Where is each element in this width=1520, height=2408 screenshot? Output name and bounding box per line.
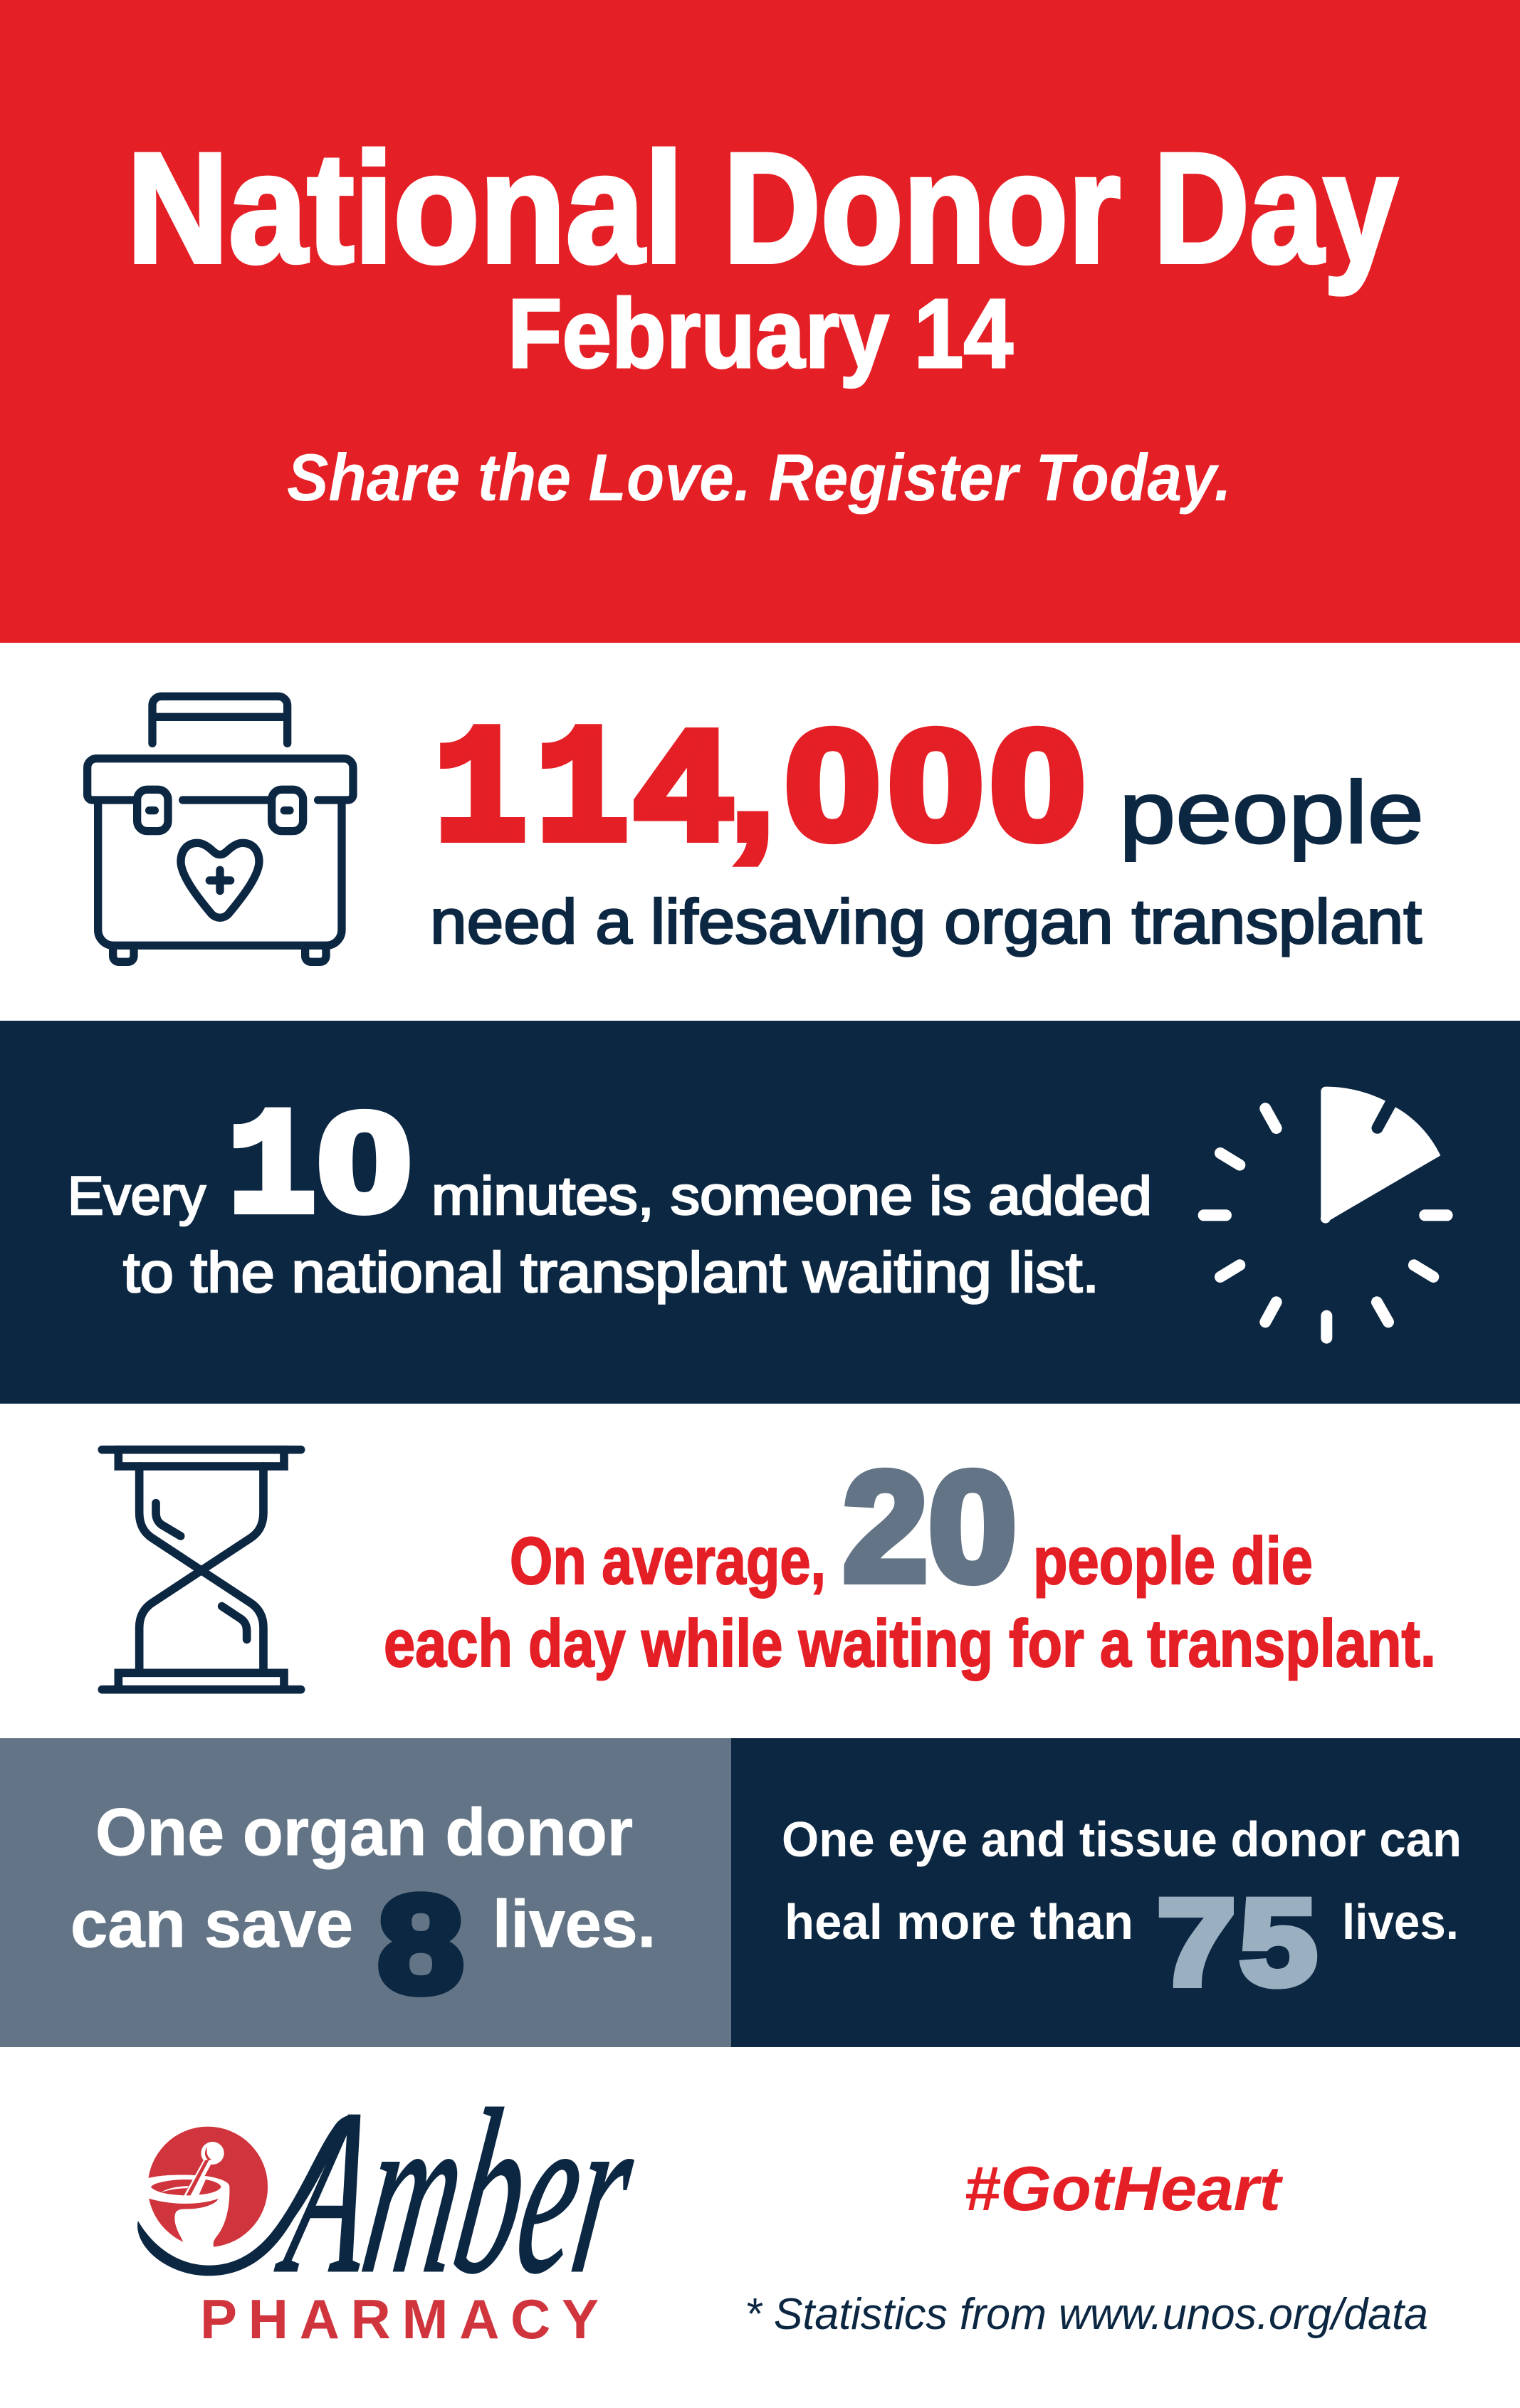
statistic: 20: 2	[843, 1441, 928, 1614]
label: people: people	[1119, 764, 1424, 862]
text: heal more than: heal more than	[785, 1894, 1133, 1950]
title: Day	[1153, 120, 1398, 295]
statistic: 114,000: 0	[888, 699, 984, 872]
swoosh	[137, 2115, 352, 2276]
title: Donor	[723, 120, 1121, 295]
statistic: 75: 7	[1157, 1874, 1236, 2011]
statistic: 20: 0	[928, 1441, 1017, 1614]
hashtag: #GotHeart	[964, 2153, 1284, 2224]
statistic: 114,000: 1	[535, 699, 629, 889]
icon: mortar and pestle	[142, 2127, 268, 2249]
statistic: 114,000: 0	[990, 699, 1086, 872]
statistic: 10: 0	[318, 1085, 412, 1240]
text: on average: On average,	[510, 1523, 826, 1598]
text: minutes: minutes, someone is added	[431, 1166, 1152, 1226]
statistic: 20	[843, 1441, 1017, 1614]
panel: 20 people	[102, 1441, 1436, 1690]
logo: Amber Pharmacy	[137, 2061, 651, 2350]
icon: hourglass	[102, 1450, 301, 1690]
statistic: 114,000	[434, 699, 1086, 889]
statistic: 75	[1157, 1874, 1317, 2011]
wordmark: Pharmacy: PHARMACY	[200, 2288, 599, 2350]
panel: every 10 minutes	[0, 1021, 1520, 1404]
statistic: 114,000: 0	[785, 699, 881, 872]
statistic: 75: 5	[1239, 1874, 1317, 2011]
tagline: Share the Love. Register Today.	[287, 440, 1232, 515]
statistic: 8: 8	[378, 1867, 463, 2021]
panel: header	[0, 0, 1520, 643]
source note: * Statistics from www.unos.org/data	[745, 2290, 1428, 2339]
statistic: 114,000: ,	[730, 699, 775, 872]
panel: eye and tissue donor	[731, 1738, 1520, 2047]
caption: transplant need: need a lifesaving organ transplant	[430, 886, 1422, 957]
statistic: 114,000: 4	[636, 699, 730, 872]
icon: organ transport box	[88, 696, 353, 962]
statistic: 10	[228, 1085, 412, 1256]
text: every: Every	[68, 1166, 206, 1226]
icon: clock	[1204, 1087, 1447, 1338]
panel: people waiting	[88, 696, 1424, 962]
text: can save: can save	[70, 1886, 353, 1961]
wordmark: Amber: Amber	[266, 2061, 651, 2322]
statistic: 10: 1	[228, 1086, 316, 1256]
date: February 14	[508, 279, 1013, 389]
text: one organ donor: One organ donor	[95, 1794, 633, 1869]
text: waiting list: to the national transplant waiting list.	[123, 1241, 1099, 1304]
title: National	[127, 120, 683, 295]
panel: organ donor	[0, 1738, 731, 2047]
text: people die: people die	[1033, 1523, 1313, 1598]
text: one eye and tissue donor: One eye and tissue donor can	[782, 1812, 1462, 1867]
text: lives: lives.	[1342, 1894, 1459, 1950]
statistic: 114,000: 1	[434, 699, 528, 889]
title	[127, 120, 1398, 295]
text: lives: lives.	[493, 1886, 656, 1961]
